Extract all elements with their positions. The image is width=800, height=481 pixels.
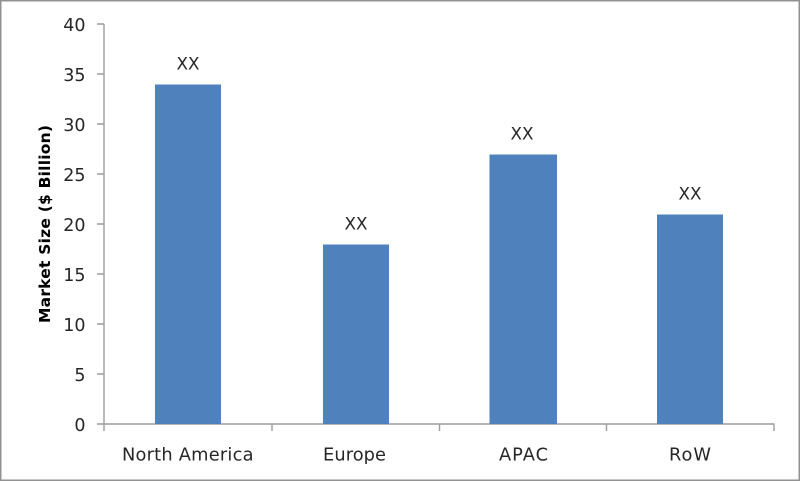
bar: RoW (657, 214, 723, 424)
bar: North America (155, 84, 221, 424)
bar: APAC (490, 154, 557, 424)
x axis (104, 424, 774, 431)
data labels: XX (176, 54, 200, 74)
y axis tick labels (63, 16, 86, 436)
y axis tick labels: 0 (74, 416, 86, 436)
y axis title: Market Size ($ Billion) (36, 125, 54, 323)
y axis tick labels: 15 (63, 266, 86, 286)
data labels: XX (344, 214, 368, 234)
category labels (122, 444, 711, 466)
y axis tick labels: 10 (63, 316, 86, 336)
y axis tick labels: 40 (63, 16, 86, 36)
bar: Europe (323, 244, 389, 424)
y axis tick labels: 35 (63, 66, 86, 86)
category labels: RoW (669, 444, 711, 466)
y axis tick labels: 30 (63, 116, 86, 136)
category labels: APAC (499, 444, 548, 466)
data labels (176, 54, 702, 234)
category labels: Europe (323, 444, 386, 466)
y axis (97, 24, 104, 424)
data labels: XX (510, 124, 534, 144)
y axis tick labels: 20 (63, 216, 86, 236)
data labels: XX (678, 184, 702, 204)
y axis tick labels: 25 (63, 166, 86, 186)
category labels: North America (122, 444, 254, 466)
y axis tick labels: 5 (74, 366, 86, 386)
